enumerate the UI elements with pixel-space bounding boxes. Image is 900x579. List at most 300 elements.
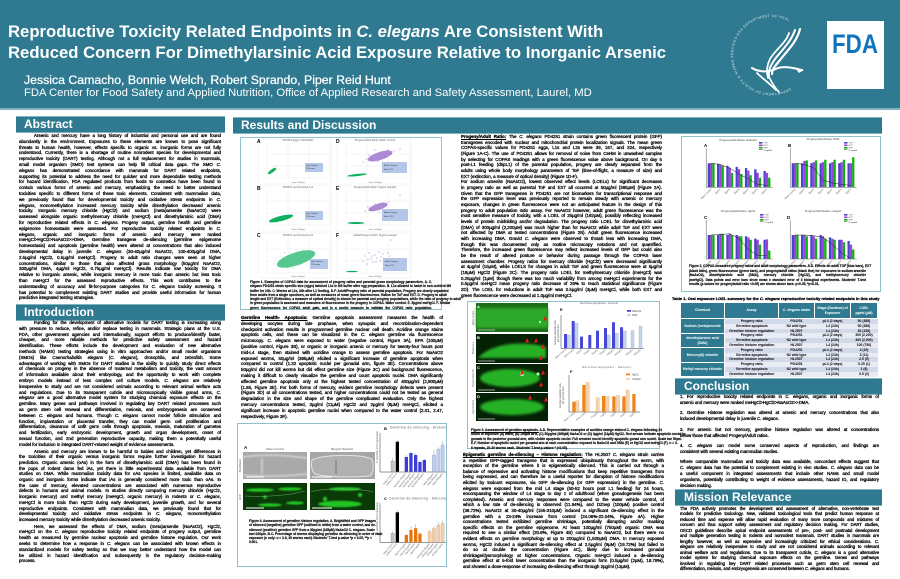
chart: six scatter plots: Adults Progeny <box>385 260 398 263</box>
axis labels: Time of Flight <box>368 275 382 278</box>
text: conclusion: 4. C. elegans can model some conserved aspects of reproduction, and findings are <box>680 443 879 448</box>
text: histone regulation: evident effects on germline morphology at up to 200µg/ml (1,500µM) DMA. In mercury exposed <box>463 536 664 541</box>
text: introduction: inexpensive to study and are not considered animals according to relevant animal welfare acts <box>19 384 221 389</box>
caption: figure 2: (meHgCl). Data points and error bars show mean ± standard error of 3 biological experiments. Students' T-test <box>689 278 866 282</box>
chart: micrographs and bar charts <box>238 426 446 559</box>
text: histone regulation: worms, HgCl2 induced a significant de-silencing effect at 2.5µg/ml (9µM) (19.72%) but failed to <box>463 542 664 546</box>
table: LOEL summary: Germline apoptosis <box>736 338 768 342</box>
chart: de-silencing mercury: C <box>384 496 387 501</box>
chart: de-silencing arsenic <box>376 426 446 488</box>
plot titles: Progeny/Adult Ratio: 5µg/ml meHgCl <box>354 185 397 189</box>
chart: de-silencing mercury: HgCl2 1.5µg/ml <box>395 543 407 557</box>
chart D <box>784 220 857 272</box>
text: progeny adult ratio: Given that the GFP transgenes in PD4251 are not biomarkers for transcriptional response and <box>461 191 662 196</box>
text: progeny adult ratio: progeny to adult population ratio assay. For NaAsO2 however, adult green fluorescence was the <box>461 208 662 213</box>
caption: figure 1: in green population is assessed and measures of fluorescence in the progeny in COPAS. Water control. E. 5µg/ml meHgCl. F. Similar <box>250 301 450 305</box>
text: conclusion: a useful component in integrated assessments that include other NAMs and small model <box>680 471 879 476</box>
chart: apoptosis mercury: BPA Control <box>576 411 587 421</box>
table: LOEL summary: Germline histone regulation <box>729 329 774 333</box>
chart: six scatter plots: TOF mean <box>306 168 315 170</box>
table: LOEL summary: Exposure <box>825 310 840 314</box>
table: LOEL summary: 400 (2,900) <box>855 338 873 342</box>
chart: de-silencing mercury: HgCl2 5µg/ml <box>410 543 421 555</box>
table: LOEL summary: Sodium (meta)arsenite <box>684 324 721 328</box>
text: introduction: Here, we assessed the effects of DMA, sodium (meta)arsenite (NaAsO2), HgCl2, <box>34 524 221 529</box>
caption: figure 4: exposure (n only: n = 3-6, 36 worms each) Students' T-test p-value *p < 0.05, **p < <box>249 536 372 540</box>
text: abstract: Arsenic and mercury have a long history of industrial and personal use and are found <box>34 133 221 138</box>
text: progeny adult ratio: post-L1 feeding (d5pL1) of the parental population, progeny are clearly separated from the <box>461 162 662 167</box>
text: introduction <box>18 320 222 564</box>
table: LOEL summary: pL4 (2 days) <box>823 362 842 366</box>
text: introduction: embryo models instead of less complex cell culture models. C. elegans are relatively <box>19 378 221 383</box>
text: germline apoptosis: (1.85, Figure 3E). For both forms of mercury, evident germline morphology defects were present <box>241 385 443 390</box>
chart: micrographs and bar charts: Water Control <box>472 310 475 325</box>
table: LOEL summary: PD4251 <box>790 348 803 352</box>
panel: figure 1 COPAS scatter plots <box>240 137 442 310</box>
text: mission relevance: differentiation, meiosis, and embryogenesis are conserved between C. elegans and humans. <box>680 566 850 571</box>
text: germline apoptosis: compared to control (1.32 apoptotic nuclei per gonadal arm, figure 3E). Concentrations above <box>241 361 443 366</box>
table: LOEL summary: Germline apoptosis <box>736 367 768 371</box>
panel letters: B <box>788 143 792 148</box>
text: introduction: health as measured by germline nuclear apoptosis and germline histone regulation. Our work <box>19 535 221 540</box>
icon: FDA logo <box>827 21 884 89</box>
text: germline apoptosis: significant increase in apoptotic germline nuclei when compared to the water control (2.01, 2.47, <box>241 408 443 413</box>
table: LOEL summary: HL2507 <box>790 343 803 347</box>
chart: apoptosis arsenic: DMA <box>632 314 638 317</box>
caption: figure 3: 6 repeats, 20-30 worms each. Students' T-test p-values * (<0.05). <box>471 446 568 450</box>
caption: figure 1: buffer for 24h. C. Worms at L2s, 24h after L1 feeding. D-F. Adult/Progeny ratio of parental population. Progeny are clearly separated <box>250 289 449 293</box>
text: abstract: assessed alongside organic methylmercury chloride (meHgCl) and dimethylarsinic acid (DMA) <box>19 214 221 219</box>
axis labels: Time of Flight <box>368 228 382 231</box>
table: LOEL summary: 100 (750) <box>857 343 871 347</box>
text: abstract: meHgCl>HgCl2>NaAsO2>>DMA. Germline transgene de-silencing (germline epigenome <box>19 237 221 242</box>
panel letters <box>704 143 792 220</box>
text: conclusion: decision making. <box>680 483 712 488</box>
header banner <box>0 0 900 110</box>
text: histone regulation <box>462 452 664 570</box>
text: germline apoptosis: apoptotic cells, and these can be visualized in the C. elegans germline via fluorescence <box>241 332 443 337</box>
plot titles: Progeny/Adult Ratio: Water Control <box>355 138 396 142</box>
table: LOEL summary: 3 (11) <box>860 353 868 357</box>
table: LOEL summary: 2.5 (9) <box>859 357 869 361</box>
chart: de-silencing mercury: HgCl2 3µg/ml <box>405 543 416 555</box>
text: mission relevance: involved in regulating key DART related processes such as germ stem cell renewal and <box>680 561 879 566</box>
text: introduction: cheaper, and more reliable methods for predictive safety assessment and hazard <box>19 337 221 342</box>
chart: apoptosis mercury: 0.5µg/ml <box>591 412 599 419</box>
text: progeny adult ratio: 0.25µg/ml (1µM) though there was too much variability from among meHgCl experiments for the <box>461 276 662 281</box>
axis labels: Time of Flight <box>368 181 382 184</box>
text: histone regulation: germline with a 23-24% increase from control (24.06%-22.04%, Figure 4A). Higher <box>463 514 664 519</box>
text: introduction: methods (NAMS) testing strategies using in vitro approaches and/or small model organisms <box>19 349 221 354</box>
text: introduction: and regulations. Due to its transparent cuticle and microscopically visible gonad arms, C. <box>19 390 221 395</box>
text: introduction: and fertilization, early embryonic development, growth and organ development, onset of <box>19 430 221 435</box>
text: progeny adult ratio: with increasing DMA. Gravid C. elegans were observed to thrash less with increasing DMA, <box>461 236 662 241</box>
brightfield micrographs <box>243 452 307 479</box>
chart: apoptosis mercury: 4µg/ml <box>629 412 636 418</box>
table: LOEL summary: L4 (24h) <box>826 372 839 376</box>
chart: micrographs and bar charts: A <box>244 445 248 450</box>
text: progeny adult ratio: by selecting for COPAS readings with a green fluorescence value above background. On day 5 <box>461 157 662 162</box>
text: germline apoptosis: 50µg/ml did not kill worms but did effect germline size (Figure 3C) and background fluorescence, <box>241 367 443 372</box>
panel letters: B <box>257 186 261 192</box>
text: abstract: 2.5µg/ml HgCl2, 0.5µg/ml meHgCl). Progeny to adult ratio changes were seen at higher <box>19 255 221 260</box>
text: conclusion: 1. For reproductive toxicity related endpoints in C. elegans, organic and inorganic forms of <box>680 394 879 399</box>
caption: figure 3: gonads in the posterior gonadal arm, with visible apoptotic nuclei. Full arrowed nuclei identify apoptotic gonad arm nuclei. Scale bar 50µm. <box>471 437 682 441</box>
table: LOEL summary: N2 wild type <box>787 324 806 328</box>
chart A <box>700 148 773 200</box>
text: histone regulation: a repetitive GFP-tagged transgene that is expressed ubiquitously throughout the worm, with <box>463 458 664 463</box>
table: LOEL summary: HL2507 <box>790 329 803 333</box>
apoptosis arrows <box>520 316 548 402</box>
green clusters <box>267 167 367 272</box>
text: abstract: concentrations, similar to those that also affected gross morphology (50µg/ml NaAsO2, <box>19 261 221 266</box>
chart: apoptosis mercury: 2µg/ml <box>610 412 617 418</box>
text: progeny adult ratio: though this was documented only as routine microscopy notations and not quantified. <box>461 242 662 247</box>
chart: apoptosis arsenic: BPA Control <box>564 348 575 358</box>
text: progeny adult ratio: COPAS-specific values for PD4251 eggs, L1s and L2s were 39, 167, and 324, respectively <box>461 145 662 150</box>
text: abstract: elegans has demonstrated concordance with mammals for DART related endpoints, <box>19 168 221 173</box>
text: introduction: as germ stem cell renewal and differentiation, meiosis, and embryogenesis are conserved <box>19 407 221 412</box>
chart: de-silencing mercury <box>376 496 446 559</box>
chart: six scatter plots <box>257 138 412 278</box>
text: abstract: abundantly in the environment. Exposures to these elements are known to pose significant <box>19 139 221 144</box>
text: histone regulation: do so at double the concentration (Figure 4C), likely due to increased gonadal <box>463 547 664 552</box>
chart B <box>784 148 857 200</box>
text: progeny adult ratio: Therefore, the increased green fluorescence may reflect increased levels of GFP but could also <box>461 247 662 252</box>
chart: de-silencing mercury: HgCl2 2.5µg/ml <box>400 543 412 557</box>
chart: six scatter plots: Mean TOF <box>384 216 394 218</box>
text: progeny adult ratio: transgenes encoded with nuclear and mitochondrial protein localization signals. The mean green <box>461 140 662 145</box>
text: introduction: advantages of working with SMOs for DART studies is the ability to quickly study direct effects <box>19 361 221 366</box>
text: introduction: FDA, other government agencies and internationally, support efforts to produce/identify faster, <box>19 332 221 337</box>
text: progeny adult ratio: in progeny ratio as well as parental ToF and EXT all occurred at 50µg/ml (385µM) (Figure 2A). <box>461 185 662 190</box>
text: germline apoptosis: degradation in the size and shape of the germline complicated evaluation. Only the highest <box>241 396 443 401</box>
text: progeny adult ratio: the GFP expression level was previously reported to remain steady with arsenic or mercury <box>461 196 662 201</box>
text: histone regulation: Epigenetic germline de-silencing – Histone regulation: The HL2507 C. elegans strain carries <box>463 452 664 457</box>
text: mission relevance: and multiple generation testing in rodents and nonrodent mammals. DART studies in mammals are <box>680 533 879 538</box>
panel letters: A <box>704 143 708 148</box>
text: abstract: has potential to complement existing DART studies and provide useful information for human <box>19 290 221 295</box>
text: mission relevance: animal welfare acts and regulations. Due to its transparent cuticle, C. elegans is a good alternative <box>680 550 879 555</box>
chart: six scatter plots: Adults Progeny <box>384 211 397 214</box>
text: histone regulation: encompassing the window of L4 stage to day 1 of adulthood (when gonadogenesis has been <box>463 491 664 496</box>
caption: figure 4: Figure 4. Assessment of germline histone regulation. A. Brightfield and GFP images <box>249 519 376 523</box>
table: LOEL summary: N2 wild type <box>787 367 806 371</box>
chart: de-silencing mercury: DZNep Control <box>386 542 398 556</box>
panel letters: A <box>257 139 261 145</box>
chart: micrographs and bar charts: B <box>477 335 480 340</box>
text: mission relevance <box>680 506 880 572</box>
text: abstract: contain various forms of arsenic and mercury, emphasizing the need to better understand <box>19 185 221 190</box>
chart: apoptosis arsenic: Germline Apoptosis - Arsenic <box>580 301 619 305</box>
text: conclusion: consistent with several existing mammalian studies. <box>680 449 778 454</box>
text: abstract: elegans, monomethylation increased mercury toxicity while dimethylation decreased arsenic <box>19 203 221 208</box>
text: germline apoptosis: (positive control, Figure 3B), or organic or inorganic arsenic or mercury for twenty-four hours post <box>241 344 443 349</box>
text: introduction: germline. Many genes and pathways involved in regulating key DART related processes such <box>19 401 221 406</box>
caption: figure 4: bar=100µm. B-C. Percentage of worms displaying germline de-silencing in order of each <box>249 532 382 536</box>
text: abstract: we previously found that for developmental toxicity and oxidative stress endpoints in C. <box>19 197 221 202</box>
title: Reduced Concern For Dimethylarsinic Acid Exposure Relative to Inorganic Arsenic <box>8 42 666 62</box>
text: introduction: identification. These efforts include the development and evaluation of new alternative <box>19 343 221 348</box>
text: abstract: for reproductive related effects in C. elegans. Progeny output, germline health and germline <box>19 220 221 225</box>
text: mission relevance: model system for studying chemical exposure effects on the germline. Genes and pathways <box>680 555 879 560</box>
text: abstract: toxicity. Inorganic mercury chloride (HgCl2) and sodium (meta)arsenite (NaAsO2) were <box>19 208 221 213</box>
chart: apoptosis arsenic: 5µg/ml <box>576 349 583 355</box>
affiliation: FDA Center for Food Safety and Applied Nutrition, Office of Applied Research and Safety Assessment, Laurel, MD <box>24 87 592 99</box>
chart: micrographs and bar charts: C <box>477 365 480 370</box>
heading: Mission Relevance: Mission Relevance <box>684 490 791 504</box>
chart: six scatter plots: TOF mean <box>311 264 320 266</box>
chart: apoptosis arsenic: Average apoptotic cells <box>554 320 557 345</box>
table: LOEL summary: 4 (15) <box>860 348 868 352</box>
table: LOEL summary: (DMA) <box>698 341 707 345</box>
axis labels: Time of Flight <box>291 228 305 231</box>
text: abstract: epigenome homeostasis were assessed. For reproductive toxicity related endpoints in C. <box>19 226 221 231</box>
GFP micrographs <box>243 483 307 510</box>
table: LOEL summary: Progeny ratio <box>741 362 763 366</box>
chart: de-silencing arsenic: NaAsO2 50µg/ml <box>407 472 421 488</box>
text: histone regulation: elicited by toxicant exposures, via GFP de-silencing (or GFP expression) in the germline. C. <box>463 480 664 485</box>
chart: apoptosis mercury: meHgCl <box>632 378 641 381</box>
table: LOEL summary: L4 (24h) <box>826 353 839 357</box>
plot titles: Adults/Progeny Ratio: 5µg/ml meHgCl <box>353 233 397 237</box>
caption: figure 3 <box>471 428 685 450</box>
text: abstract: understanding of accuracy and fit-for-purpose categories for C. elegans toxicity screening. It <box>19 284 221 289</box>
text: histone regulation: concentrations tested exhibited germline shrinkage, potentially disrupting and/or masking <box>463 519 664 524</box>
text: introduction: model for inclusion in integrated DART-related weight of evidence assessments. <box>19 442 174 447</box>
panel: figure 3 germline apoptosis <box>467 301 660 449</box>
text: progeny adult ratio: most sensitive measure of toxicity, with a LOEL of 25µg/ml (192µM), possibly reflecting increased <box>461 213 662 218</box>
text: conclusion: 3. For arsenic but not mercury, germline histone regulation was altered at concentrations <box>680 427 879 432</box>
text: abstract: supporting its potential to address the need for quicker and more dependable testing methods <box>19 174 221 179</box>
table: LOEL summary: pL4 (2 days) <box>823 319 842 323</box>
table: LOEL summary: Chemical <box>695 308 710 312</box>
table: LOEL summary: Methyl mercury chloride <box>683 367 722 371</box>
text: introduction: developmental toxicity and oxidative stress endpoints in C. elegans, monomethylation <box>19 511 221 516</box>
chart: de-silencing arsenic: DMA 300µg/ml <box>432 472 444 486</box>
text: abstract: threats to human health, however, effects specific to organic vs. inorganic forms are not fully <box>19 145 221 150</box>
heading: Introduction: Introduction <box>24 305 94 319</box>
text: progeny adult ratio: 2D). The LOEL for reductions in adult ToF was 0.5µg/ml (3µM) meHgCl, while both EXT and <box>461 287 662 292</box>
text: mission relevance: lengthy however, as well as expensive and increasingly criticized for ethical considerations. C. <box>680 539 879 544</box>
text: histone regulation: being expressed, and can therefore be a useful reporter for disruption of histone modifications <box>463 474 664 479</box>
caption: figure 2: results (p-values for progeny/adult ratio <0.05) are shown above bars. p<0.05, *p<0.01. <box>689 282 819 286</box>
caption: figure 2: Figure 2. COPAS-measured progeny ratios and adult morphology parameters. A-D. Effects on adult TOF (blue bars), EXT <box>689 264 871 268</box>
plot titles: PD4251 synchronized L1s <box>283 185 314 189</box>
caption: figure 1: green fluorescence for COPAS adult gate, and is a useful measure to validate the COPAS ratio population. <box>250 306 432 310</box>
caption: figure 2: (NaAsO2), dimethylarsinic acid (DMA), mercury chloride (HgCl2), and methylmercury chloride <box>689 273 866 277</box>
chart titles: Progeny/Adult Ratios: meHgCl <box>805 209 842 213</box>
chart: de-silencing mercury: meHgCl 1µg/ml <box>427 543 439 557</box>
text: abstract: predictive integrated testing strategies. <box>19 295 94 300</box>
text: introduction: reproductive endpoints. Consistent with mammalian data, we previously found that for <box>19 506 221 511</box>
micrographs A-D <box>476 303 548 332</box>
chart: micrographs and bar charts: 50µg/ml NaAsO2 <box>472 369 475 387</box>
chart: apoptosis arsenic: 50µg/ml <box>599 349 607 356</box>
chart: apoptosis mercury: per gonadal arm <box>562 387 565 404</box>
chart: de-silencing arsenic: B <box>384 426 387 431</box>
text: mission relevance: The FDA actively promotes the development and assessment of alternative, non-vertebrate test <box>680 506 879 511</box>
caption: figure 4: silenced (positive) germline GFP from a 30µg/ml (185µM) NaAsO2 C. elegans. Scale <box>249 528 375 532</box>
chart: apoptosis mercury: Water Control <box>563 411 576 422</box>
chart: micrographs and bar charts <box>472 301 644 422</box>
chart: six scatter plots: Gate Statistics <box>311 260 323 263</box>
chart: apoptosis arsenic: 100µg/ml <box>606 349 615 357</box>
table: LOEL summary: Progeny ratio <box>741 333 763 337</box>
text: germline apoptosis: mid-L4 stage, then stained with acridine orange to assess germline apoptosis. For NaAsO2 <box>241 350 443 355</box>
text: histone regulation: exception of the germline where it is epigenetically silenced. This is carried out through a <box>463 463 664 468</box>
heading: Abstract: Abstract <box>24 117 73 131</box>
text: abstract: homeostasis) and apoptosis (germline health) were altered at concentrations that also induced <box>19 243 221 248</box>
text: progeny adult ratio: not affected by DMA at tested concentrations (Figure 2B). Adult green fluorescence increased <box>461 230 662 235</box>
text: introduction: Funding for the development of alternative models for DART testing is increasing along <box>34 320 221 325</box>
text: introduction: with pressure to reduce, refine, and/or replace testing in mammals. Strategic plans at the U.S. <box>19 326 221 331</box>
table: LOEL summary: HL2507 <box>790 357 803 361</box>
chart: de-silencing mercury: Germline de-silencing - Mercury <box>389 496 446 500</box>
text: conclusion: C. elegans data has the potential to complement existing in vivo studies. C. elegans data can be <box>680 465 879 470</box>
text: progeny adult ratio: at 4µg/ml (15µM), while LOELS for changes in adult ToF and green fluorescence were at 5µg/ml <box>461 264 662 269</box>
table: LOEL summary <box>681 303 878 377</box>
table: LOEL summary: 30 (155) <box>858 329 870 333</box>
text: mission relevance: models for predictive toxicology. New, validated toxicological tools that predict human response at <box>680 511 879 516</box>
panel letters <box>257 139 340 239</box>
title: Reproductive Toxicity Related Endpoints in C. elegans Are Consistent With <box>8 22 603 40</box>
panel letters: D <box>336 139 340 145</box>
text: histone regulation: germline effect at 5-fold lower concentration than the inorganic form (0.5µg/ml (2µM), 18.78%), <box>463 558 664 563</box>
text: introduction: increased mercury toxicity while dimethylation decreased arsenic toxicity. <box>19 517 161 522</box>
chart: micrographs and bar charts: A <box>477 304 480 309</box>
table: LOEL summary: N2 wild type <box>787 353 806 357</box>
text: introduction: defects in humans and animal models. In studies directly comparing mercury chloride (HgCl2, <box>19 488 221 493</box>
chart C <box>700 220 773 272</box>
table: LOEL summary: PD4251 <box>790 333 803 337</box>
text: introduction: the pups of rodent dams fed iAs, yet there is little experimental data available from DART <box>19 466 221 471</box>
text: germline apoptosis <box>241 315 444 420</box>
table: LOEL summary: pL4 (2 days) <box>823 348 842 352</box>
table: LOEL summary: Mercury(II) chloride <box>687 353 718 357</box>
table: LOEL summary: Progeny ratio <box>741 348 763 352</box>
table: LOEL summary: dimethylarsinic acid <box>686 336 719 340</box>
text: introduction: (SMOs) like Caenorhabditis elegans (C. elegans), drosophila, and zebrafish. Some <box>19 355 221 360</box>
caption: figure 1: elegans PD4251 strain specific size (eggs) hatched L1s in M9 buffer after egg preparation. B. L1s allowed to hatch in non-nutrient M9 <box>250 284 451 288</box>
plot titles: PD4251 Eggs in M9 Buffer <box>283 138 313 142</box>
text: introduction: inorganic mercury) and methyl mercury (meHgCl, organic mercury) in rodents or C. elegans, <box>19 494 221 499</box>
text: introduction: elegans are a good alternative model system for studying chemical exposure effects on the <box>19 395 221 400</box>
chart: de-silencing mercury: % Germline GFP Expression <box>376 501 379 534</box>
text: abstract: developmental delay in juvenile C. elegans (30-40µg/ml NaAsO2, 100-400µg/ml DMA, <box>19 249 221 254</box>
text: conclusion: arsenic and mercury were ranked meHgCl>HgCl2>NaAsO2>>DMA. <box>680 400 809 405</box>
text: germline apoptosis: respectively, Figure 3F). <box>241 414 288 419</box>
table: LOEL summary: L4 (24h) <box>826 343 839 347</box>
table: LOEL summary: L4 (24h) <box>826 324 839 328</box>
chart: de-silencing arsenic: NaAsO2 60µg/ml <box>411 472 425 488</box>
caption: figure 1 <box>250 280 462 310</box>
text: introduction: of information available about their embryology, and the opportunity to work with complete <box>19 372 221 377</box>
text: introduction: seeks to determine how a response in C. elegans can be associated with known effects in <box>19 541 221 546</box>
chart: apoptosis arsenic: 200µg/ml <box>614 349 623 357</box>
heading: Results and Discussion <box>233 117 882 134</box>
text: introduction: the case of mercury, elevated concentrations are associated with numerous reproductive <box>19 483 221 488</box>
chart: de-silencing arsenic: NaAsO2 40µg/ml <box>402 472 416 488</box>
text: histone regulation: elegans were exposed from the mid L4 stage (50-52 hours post L1 feeding) for 24 hours, <box>463 486 664 491</box>
table: LOEL summary: 50 (385) <box>858 319 870 323</box>
table: LOEL summary: Stage (Duration) of <box>817 306 848 310</box>
text: germline apoptosis: Germline Health- Apoptosis: Germline apoptosis assessment measures the health of <box>241 315 443 320</box>
chart: de-silencing mercury: meHgCl 0.5µg/ml <box>422 543 435 558</box>
table: LOEL summary: Progeny ratio <box>741 319 763 323</box>
text: introduction: studies on DMA. While mammalian toxicity data for oAs species is limited, available data on <box>19 471 221 476</box>
chart: apoptosis mercury: Average apoptotic cells <box>559 383 562 408</box>
text: progeny adult ratio: green fluorescence were decreased at 1.0µg/ml meHgCl. <box>461 293 572 298</box>
text: histone regulation: and showed a dose-response of increasing de-silencing effect through 2µg/ml (13µM). <box>463 564 630 569</box>
blue statistics boxes <box>305 162 408 271</box>
chart titles: Progeny/Adult Ratios: HgCl2 <box>721 209 756 213</box>
chart: de-silencing arsenic: DMA 200µg/ml <box>427 472 439 486</box>
panel: figure 4 germline de-silencing <box>237 423 447 567</box>
plot titles <box>283 138 397 237</box>
text: introduction: sexual function, and 2nd generation reproductive capacity, making them a potentially useful <box>19 436 221 441</box>
text: abstract <box>18 133 222 300</box>
caption: figure 4: of silenced (negative) germline GFP (outlined in white) from a water control, and de- <box>249 523 376 527</box>
chart: apoptosis arsenic: Water Control <box>554 348 567 359</box>
text: introduction: Arsenic and mercury are known to be harmful to babies and children, yet differences in <box>34 449 221 454</box>
text: conclusion: organisms, potentially contributing to weight of evidence assessments, hazard ID, and regulatory <box>680 477 879 482</box>
text: abstract: understood. Currently, there is a shortage of routine nonrodent species for developmental and <box>19 150 221 155</box>
text: introduction: be utilized in hazard identification and subsequently in the regulatory decision-making <box>19 553 221 558</box>
text: conclusion: Where comparable mammalian and toxicity data was available, concordant effects suggest that <box>680 459 879 464</box>
table: LOEL summary: Assay <box>746 308 756 312</box>
text: progeny adult ratio: be the result of altered posture or behavior during passage through the COPAS laser <box>461 253 662 258</box>
text: germline apoptosis: (Figure 3D) at all concentrations tested, and higher concentrations could not be tested as general <box>241 390 443 395</box>
text: germline apoptosis: microscopy. C. elegans were exposed to water (negative control, Figure 3A), BPA (100µM) <box>241 338 443 343</box>
purple clusters <box>366 148 394 213</box>
chart: apoptosis arsenic: per gonadal arm <box>557 325 560 342</box>
chart: apoptosis mercury: 1µg/ml <box>600 412 607 418</box>
heading: Results and Discussion: Results and Discussion <box>241 118 376 132</box>
text: germline apoptosis: exposed worms, 50µg/ml (385µM) elicited a significant increase of germline apoptosis when <box>241 356 443 361</box>
text: germline apoptosis: making it difficult to clearly visualize the germline and count apoptotic nuclei. DMA significantly <box>241 373 443 378</box>
text: introduction: of chemicals on progeny in the absence of maternal metabolism and toxicity, the vast amount <box>19 366 221 371</box>
table: LOEL summary: µg/ml (µM) <box>856 310 872 314</box>
table: LOEL summary: Germline histone regulation <box>729 343 774 347</box>
chart: six scatter plots: TOF mean <box>306 216 315 218</box>
text: conclusion: 2. Germline Histone regulation was altered at arsenic and mercury concentrations that also <box>680 410 879 415</box>
plot titles: PD4251 synchronized L2s <box>283 233 314 237</box>
text: histone regulation: which a low rate of de-silencing is observed (11.94%), and DZnep (100µM) positive control <box>463 502 664 507</box>
table: LOEL summary: Germline histone regulation <box>729 372 774 376</box>
chart: six scatter plots: Gate Statistics <box>306 164 318 167</box>
text: histone regulation: shrinkage/dysmorphology at higher concentrations. Organic meHgCl induced a de-silencing <box>463 553 664 558</box>
table: LOEL summary: LOEL <box>859 306 869 310</box>
panel letters: E <box>336 186 340 192</box>
caption: figure 3: Figure 3. Assessment of germline apoptosis. A-D. Representative examples of acridine orange stained C. elegans following 24 <box>471 428 662 432</box>
heading: Conclusion: Conclusion <box>684 379 749 393</box>
table title: Table 1. Oral exposure LOEL summary for the C. elegans reproductive toxicity related endpoints in this study <box>672 296 879 301</box>
text: conclusion: induced developmental delay in juvenile C. elegans. <box>680 416 779 421</box>
chart: micrographs and bar charts: D <box>477 394 480 399</box>
chart: apoptosis arsenic: 25µg/ml <box>591 349 599 356</box>
table: LOEL summary: L4 (24h) <box>826 367 839 371</box>
table: LOEL summary: Germline apoptosis <box>736 324 768 328</box>
table: LOEL summary: 0.5 (2) <box>859 372 869 376</box>
chart: six scatter plots: Adults Progeny <box>384 164 397 167</box>
text: progeny adult ratio: (DMA) of 300µg/ml (2,200µM) was much higher than for NaAsO2 while adult ToF and EXT were <box>461 225 662 230</box>
table: LOEL summary: N2 wild type <box>787 338 806 342</box>
text: histone regulation: balance of repressive and activating histone modifications that keep repetitive transgenes from <box>463 469 664 474</box>
chart: six scatter plots: Mean TOF <box>385 265 395 267</box>
table: LOEL summary: Germline histone regulation <box>729 357 774 361</box>
text: introduction: process. <box>19 558 36 563</box>
